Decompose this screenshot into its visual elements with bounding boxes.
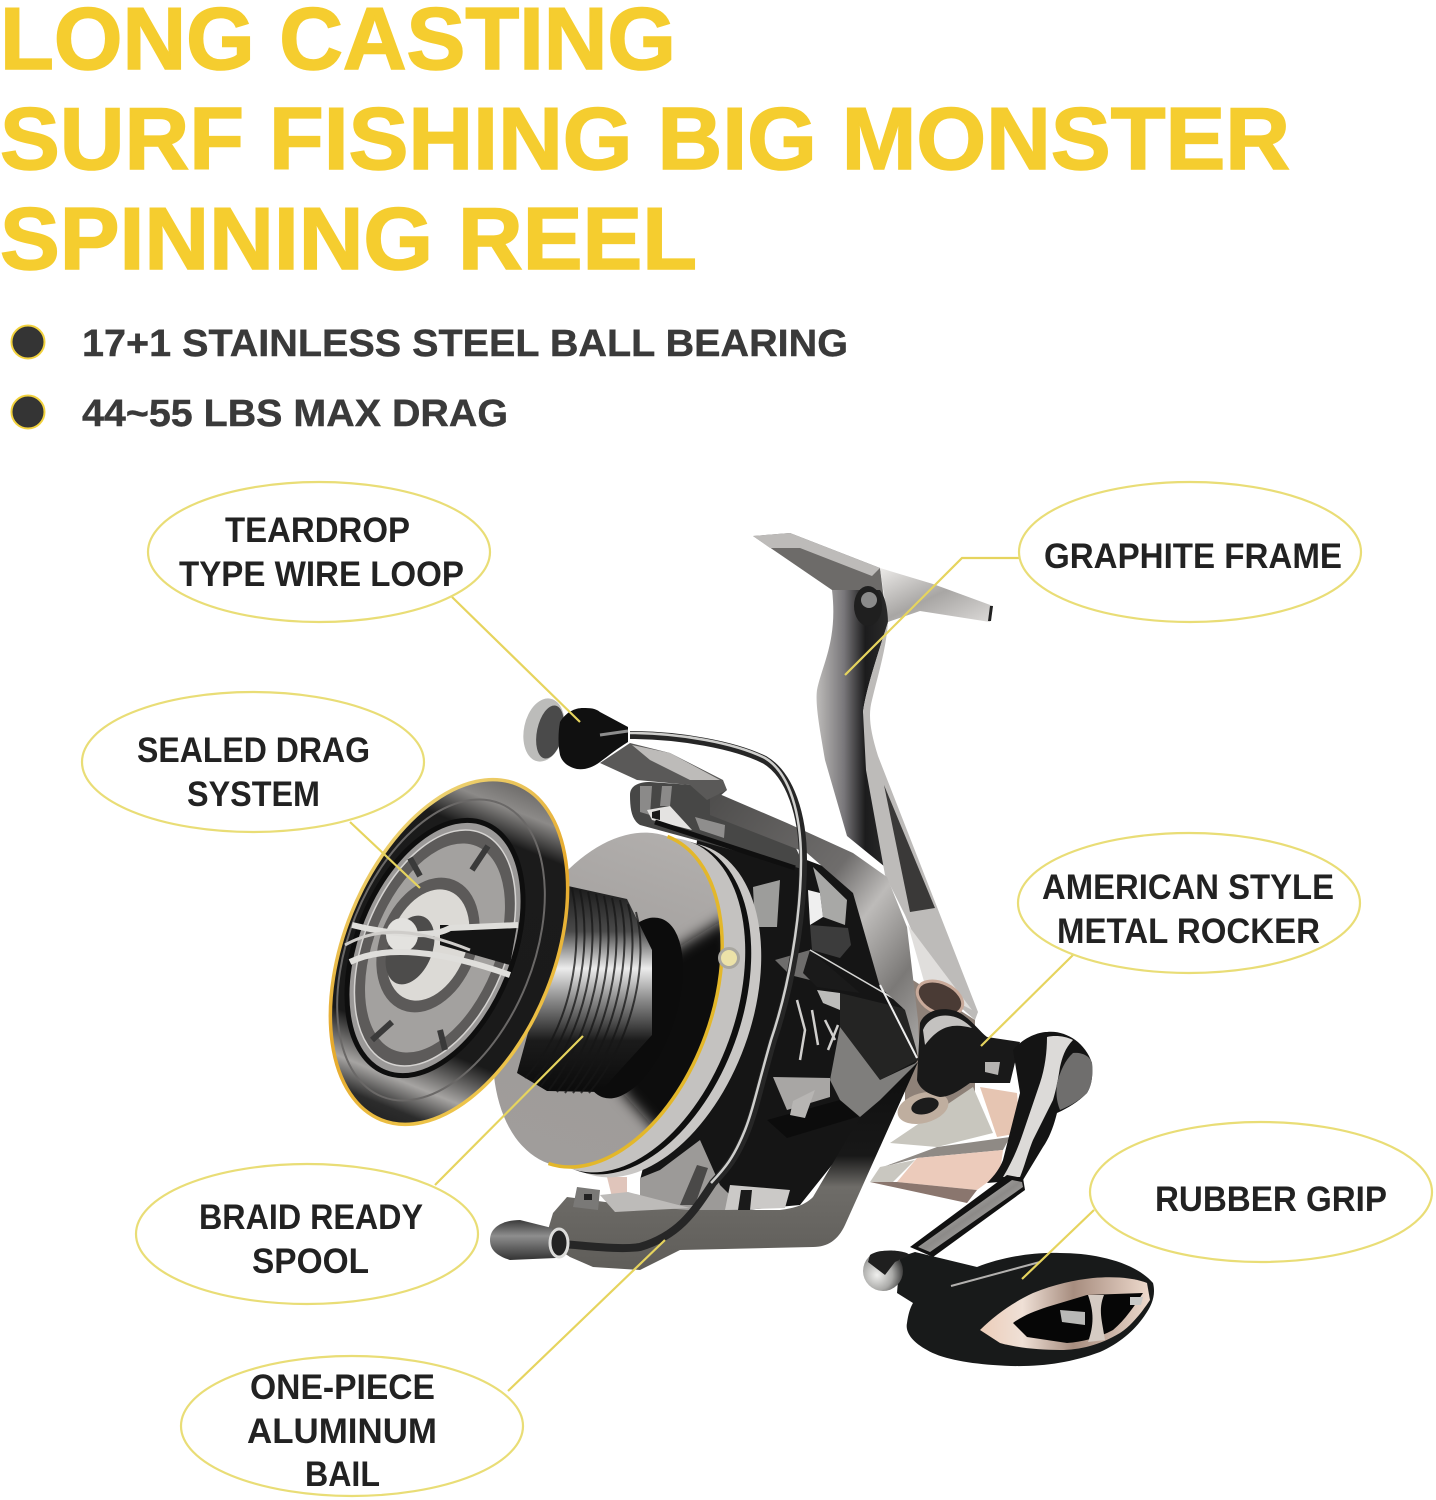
callout: rubber grip: RUBBER GRIP (1155, 1180, 1387, 1219)
callout: teardrop type wire loop: TEARDROP (225, 511, 410, 550)
bail wire and line roller (490, 695, 803, 1260)
title: SPINNING REEL (0, 189, 697, 288)
lower foot frame (545, 1062, 918, 1270)
upper frame band (710, 790, 920, 1062)
body dark backdrop (640, 820, 918, 1215)
roller arm (600, 743, 727, 800)
spool line cylinder (517, 886, 703, 1111)
bail wire (562, 735, 803, 1248)
callout: graphite frame (845, 482, 1361, 675)
rear housing panels (870, 974, 1020, 1203)
callout: one-piece aluminum bail: ONE-PIECE (250, 1368, 435, 1407)
rocker arm and crank handle (910, 1009, 1092, 1257)
spinning reel illustration (284, 533, 1154, 1366)
title (0, 0, 1290, 288)
top bracket (630, 782, 806, 870)
callout: teardrop type wire loop (148, 482, 580, 722)
reel body frame (545, 782, 920, 1270)
callout: braid ready spool: BRAID READY (199, 1198, 423, 1237)
callout: sealed drag system: SEALED DRAG (137, 731, 370, 770)
callout: teardrop type wire loop: TYPE WIRE LOOP (179, 555, 464, 594)
rubber grip handle knob (863, 1250, 1154, 1366)
callout: rubber grip (1022, 1122, 1432, 1279)
callout: american style metal rocker (981, 833, 1360, 1046)
gear mechanism (797, 1000, 838, 1060)
bullet list (12, 323, 848, 435)
reel foot and stem (753, 533, 993, 1020)
callout: american style metal rocker: METAL ROCKER (1057, 912, 1320, 951)
bail tube end (490, 1220, 556, 1260)
callout: american style metal rocker: AMERICAN STYLE (1042, 868, 1334, 907)
front spool with drag knob (284, 745, 614, 1159)
callout: braid ready spool (136, 1036, 583, 1304)
bullet: ball bearing: 17+1 STAINLESS STEEL BALL BEARING (82, 323, 848, 365)
lower silver wedges (830, 1027, 918, 1147)
callout: sealed drag system (82, 692, 424, 888)
line roller black housing (558, 708, 628, 769)
rear spool flange (494, 832, 762, 1178)
bullet: max drag: 44~55 LBS MAX DRAG (82, 393, 508, 435)
callout: graphite frame: GRAPHITE FRAME (1044, 537, 1342, 576)
callout: one-piece aluminum bail: ALUMINUM (247, 1412, 437, 1451)
callout: braid ready spool: SPOOL (252, 1242, 369, 1281)
callout: sealed drag system: SYSTEM (187, 775, 320, 814)
callout: one-piece aluminum bail: BAIL (305, 1455, 380, 1494)
line roller ring (518, 695, 570, 765)
line clip pin (720, 948, 738, 968)
title: SURF FISHING BIG MONSTER (0, 89, 1290, 188)
callout: one-piece aluminum bail (181, 1240, 665, 1496)
